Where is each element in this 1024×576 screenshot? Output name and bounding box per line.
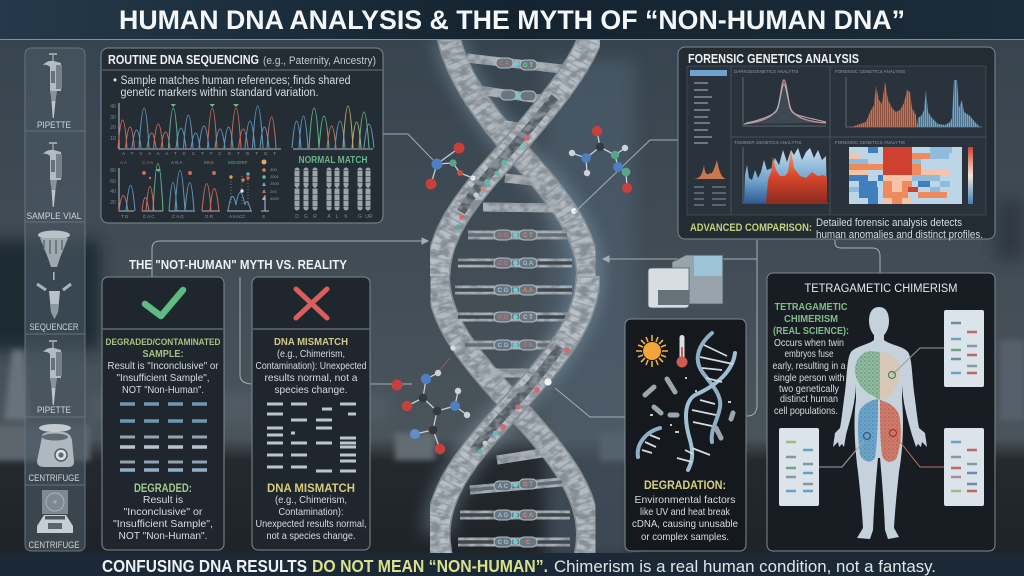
icon: centrifuge with lid [37, 424, 74, 467]
gel card: top right [944, 310, 984, 387]
dashboard sidebar [690, 70, 727, 205]
text: degraded/contaminated sample: "Insufficient Sample", [116, 372, 210, 384]
chart: upper left electropherogram [118, 103, 281, 149]
icon: pipette [43, 340, 62, 405]
text: DNA mismatch lower: Contamination): [278, 506, 344, 518]
base letters [120, 151, 276, 219]
footer takeaway: CONFUSING DNA RESULTS [102, 556, 307, 576]
text: degraded [113, 483, 213, 542]
leg cell populations [858, 399, 901, 462]
chromosomes: K [344, 214, 348, 220]
footer band [0, 553, 1024, 576]
base-pair capsules and letters: C G [498, 343, 509, 349]
heading: TETRAGAMETIC CHIMERISM [804, 283, 958, 295]
base letters: A T V A A A T C C T T C G T G T G T [122, 151, 276, 156]
chart legend dots: 4000 [270, 196, 280, 201]
text: DNA mismatch lower: DNA MISMATCH [267, 483, 355, 495]
chart legend dots [142, 160, 280, 201]
chromosomes: D [295, 214, 299, 220]
chart: stacked area: TOMINER GENETICS ANALYTIS [734, 140, 801, 145]
base letters: A KACC [229, 214, 246, 219]
footer takeaway [102, 556, 936, 576]
base-pair capsules and letters: C G [498, 540, 509, 546]
text: DNA mismatch description: Contamination): Unexpected [256, 360, 367, 372]
y-axis numbers upper [110, 104, 116, 206]
text: degraded: "Insufficient Sample", [113, 518, 213, 530]
base letters: A A [120, 160, 127, 165]
chart legend dots: 2001 [270, 174, 280, 179]
base-pair capsules and letters: C C [498, 261, 509, 267]
y-axis numbers upper: 30 [110, 115, 116, 121]
heading: ROUTINE DNA SEQUENCING [108, 53, 259, 67]
text: degraded/contaminated sample [106, 337, 221, 396]
heading: not-human myth vs reality: THE "NOT-HUMAN" MYTH VS. REALITY [129, 258, 348, 272]
text: chimerism definition: early, resulting in a [772, 360, 846, 372]
text: degradation: Environmental factors [634, 494, 736, 506]
panel: degradation [625, 319, 746, 551]
text: degraded: Result is [143, 494, 183, 506]
base-pair capsules and letters: G T [523, 482, 533, 488]
chromosomes [295, 170, 373, 220]
helix glow [438, 38, 588, 534]
connector lines and arrows [152, 134, 880, 417]
base letters: C A A [142, 160, 153, 165]
base-pair capsules and letters: G A [523, 261, 534, 267]
panel: routine DNA sequencing [101, 48, 383, 223]
label: pipette: PIPETTE [37, 120, 71, 131]
chromosomes: UR [365, 214, 373, 220]
text: chimerism definition: embryos fuse [784, 348, 834, 360]
chromosomes: A [327, 214, 331, 220]
base-pair capsules and letters: C [526, 540, 531, 546]
text: chimerism definition: (REAL SCIENCE): [773, 325, 849, 337]
base letters: MOADRF [228, 160, 248, 165]
base-pair capsules and letters: A A [523, 288, 534, 294]
base-pair capsules and letters: A C [498, 484, 509, 490]
base-pair capsules and letters: C A [499, 61, 510, 67]
bullet text [113, 75, 350, 99]
gel card: bottom right [944, 428, 984, 506]
dashboard [687, 66, 986, 215]
chromosomes: L [336, 214, 339, 220]
chart: peak trace [734, 69, 826, 126]
chart: heatmap [835, 140, 973, 204]
text: chimerism definition: Occurs when twin [774, 337, 844, 349]
chart legend dots: 200 [270, 189, 277, 194]
chromosomes: G [358, 214, 362, 220]
text: DNA mismatch description: results normal, not a [264, 372, 358, 384]
text: DNA mismatch lower: (e.g., Chimerism, [275, 494, 347, 506]
gel bands: degraded [120, 404, 207, 470]
label: advanced comparison: ADVANCED COMPARISON: [690, 222, 812, 234]
text: chimerism definition: two genetically [779, 383, 840, 395]
text: chimerism definition: single person with [774, 372, 845, 384]
icon: benchtop centrifuge [37, 490, 73, 533]
icon: pipette for sample vial [43, 142, 62, 207]
chromosomes: R [313, 214, 317, 220]
label: normal match: NORMAL MATCH [298, 155, 368, 166]
panel: forensic genetics analysis [678, 47, 995, 241]
base-pair capsules and letters: A G [498, 233, 509, 239]
heading note: (e.g., Paternity, Ancestry) [263, 55, 376, 67]
label: pipette: PIPETTE [37, 405, 71, 416]
gel bands: mismatch [267, 404, 356, 471]
molecule: lower left [392, 370, 470, 454]
icon: red cross [296, 289, 327, 318]
callout: right sample [890, 430, 944, 467]
chest cell populations [855, 351, 900, 400]
base-pair capsules and letters [494, 58, 537, 547]
chart: normal match trace [292, 106, 374, 149]
chart: histogram: FORENSIC GENETICS ANALYSIS [835, 69, 905, 74]
human body figure [833, 307, 927, 539]
base letters: MAX [204, 160, 214, 165]
gel card: bottom left [779, 428, 819, 506]
comparison text: human anomalies and distinct profiles. [816, 229, 983, 241]
base letters: G R [205, 214, 214, 219]
label: sample vial: SAMPLE VIAL [26, 211, 82, 222]
y-axis numbers upper: 10 [110, 136, 116, 142]
icon: sun [636, 335, 668, 367]
helix beads [450, 135, 577, 454]
callout: top sample [888, 348, 944, 378]
base letters: T G [121, 214, 129, 219]
icon: fragmented DNA [638, 333, 735, 470]
text: degradation: cDNA, causing unusable [632, 518, 738, 530]
panel: DNA mismatch [252, 277, 370, 550]
text: degraded/contaminated sample: SAMPLE: [142, 348, 184, 360]
text: degraded: "Inconclusive" or [124, 506, 203, 518]
bullet text: Sample matches human references; finds shared [120, 75, 350, 87]
DNA double helix [438, 34, 592, 576]
heading: FORENSIC GENETICS ANALYSIS [688, 52, 859, 66]
y-axis numbers upper: 60 [110, 179, 116, 185]
text: degradation [632, 480, 738, 543]
chart: stacked area [734, 140, 828, 203]
text: DNA mismatch lower: not a species change. [266, 530, 356, 542]
text: DNA mismatch lower: Unexpected results normal, [256, 518, 366, 530]
y-axis numbers upper: 20 [110, 125, 116, 131]
y-axis numbers upper: 80 [110, 168, 116, 174]
comparison text: Detailed forensic analysis detects [816, 217, 962, 229]
text: chimerism definition: distinct human [780, 393, 838, 405]
base letters: S [262, 214, 265, 219]
base-pair rungs [455, 58, 572, 542]
molecule: upper right [569, 126, 632, 193]
base letters: A G A [171, 160, 183, 165]
icon: thermometer [676, 335, 688, 368]
bullet text: genetic markers within standard variation. [120, 87, 318, 99]
base-pair capsules and letters: A G [498, 513, 509, 519]
base-pair capsules and letters: C T [523, 233, 533, 239]
callout: left sample [819, 432, 870, 467]
base-pair capsules and letters: T A [523, 343, 533, 349]
base letters: C A C [143, 214, 155, 219]
text: degraded/contaminated sample: DEGRADED/CONTAMINATED [106, 337, 221, 348]
comparison text [816, 217, 983, 241]
text: chimerism definition: TETRAGAMETIC [774, 301, 848, 313]
text: degraded/contaminated sample: Result is "Inconclusive" or [108, 360, 219, 372]
icon: funnel and tube [37, 230, 71, 319]
text: DNA mismatch lower [256, 483, 366, 542]
base-pair capsules and letters: C T [523, 315, 533, 321]
text: DNA mismatch description [256, 336, 367, 396]
text: DNA mismatch description: DNA MISMATCH [274, 336, 348, 348]
helix front strands [438, 34, 592, 576]
text: degraded: NOT "Non-Human". [118, 530, 208, 542]
chart legend dots: 2000 [270, 181, 280, 186]
molecule: upper left [426, 142, 473, 190]
y-axis numbers upper: 20 [110, 200, 116, 206]
text: degraded: DEGRADED: [134, 483, 192, 495]
icon: check mark [145, 290, 183, 316]
panel: tetragametic chimerism [767, 273, 995, 551]
label: centrifuge: CENTRIFUGE [28, 540, 80, 551]
base-pair capsules and letters: A G [498, 315, 509, 321]
icon: sequencer machine [648, 255, 723, 308]
text: degradation: like UV and heat break [640, 506, 731, 518]
base-pair capsules and letters: C A [523, 513, 534, 519]
base letters: C A G [172, 214, 184, 219]
base-pair capsules and letters: G T [523, 63, 533, 69]
y-axis numbers upper: 40 [110, 189, 116, 195]
text: degraded/contaminated sample: NOT "Non-Human". [122, 384, 204, 396]
text: DNA mismatch description: species change. [274, 384, 348, 396]
label: sequencer: SEQUENCER [30, 322, 79, 333]
chromosomes: G [304, 214, 308, 220]
bullet text: • [113, 75, 117, 87]
icon: pipette [43, 53, 62, 118]
text: degradation: or complex samples. [641, 531, 729, 543]
chart: histogram [835, 69, 982, 127]
footer takeaway: DO NOT MEAN “NON-HUMAN”. [312, 556, 548, 576]
title: HUMAN DNA ANALYSIS & THE MYTH OF “NON-HUMAN DNA” [119, 5, 905, 35]
panel: degraded sample [102, 277, 224, 550]
chart: peak trace: DARKGEGENETICS ANALYTIS [734, 69, 798, 74]
text: chimerism definition: CHIMERISM [784, 313, 838, 325]
text: chimerism definition: cell populations. [774, 405, 838, 417]
panel: lab tools sidebar [25, 48, 85, 551]
text: DNA mismatch description: (e.g., Chimerism, [277, 348, 345, 360]
chart legend dots: 400 [270, 167, 277, 172]
text: degradation: DEGRADATION: [644, 480, 726, 492]
label: centrifuge: CENTRIFUGE [28, 473, 80, 484]
base-pair capsules and letters: C G [498, 288, 509, 294]
chart: lower left electropherogram [119, 164, 269, 211]
chart: heatmap: FORENSIC GENETICS ANALYTIS [835, 140, 905, 145]
helix back strands [438, 34, 588, 576]
header band [0, 0, 1024, 39]
y-axis numbers upper: 40 [110, 104, 116, 110]
text: chimerism definition [772, 301, 849, 417]
footer takeaway: Chimerism is a real human condition, not a fantasy. [554, 558, 936, 576]
